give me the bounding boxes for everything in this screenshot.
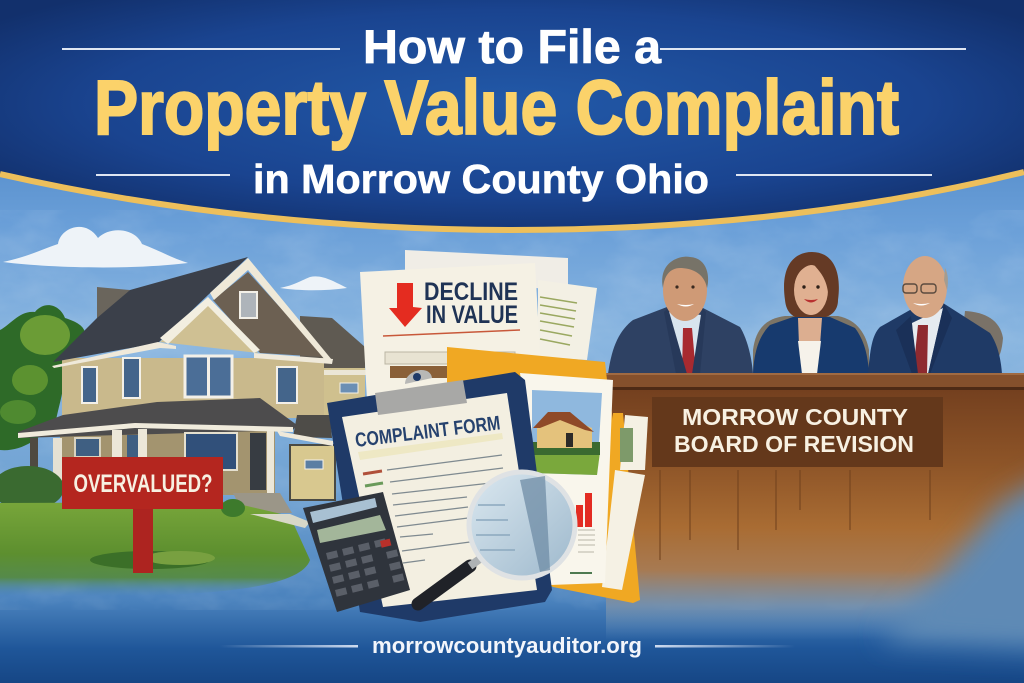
cloud	[3, 227, 347, 290]
sign: overvalued	[62, 457, 223, 573]
banner	[0, 0, 1024, 230]
sign text: OVERVALUED?	[74, 470, 212, 498]
website text: morrowcountyauditor.org	[372, 633, 642, 658]
title line 1: How to File a	[363, 20, 662, 73]
board name plate	[652, 397, 943, 467]
clip	[375, 370, 467, 415]
board member: left	[608, 257, 753, 374]
document heading	[424, 278, 518, 329]
arrow: decline	[389, 283, 422, 327]
wooden desk	[606, 373, 1024, 640]
tree	[0, 305, 85, 450]
board member: center	[753, 252, 869, 374]
folder	[447, 347, 648, 603]
house	[18, 257, 366, 513]
board name plate: BOARD OF REVISION	[674, 431, 914, 457]
house photo	[532, 390, 602, 475]
title line 2: Property Value Complaint	[94, 65, 899, 151]
board name plate: MORROW COUNTY	[682, 404, 908, 430]
magnifying glass	[418, 472, 575, 604]
document heading: IN VALUE	[426, 301, 518, 329]
document heading: DECLINE	[424, 278, 518, 306]
calculator	[303, 492, 410, 612]
form title: COMPLAINT FORM	[354, 412, 502, 452]
lawn	[0, 466, 310, 596]
bottom fade	[880, 470, 1024, 650]
clipboard	[327, 370, 552, 622]
title line 3: in Morrow County Ohio	[253, 156, 709, 202]
board member: right	[868, 256, 1003, 374]
bar chart	[576, 493, 592, 527]
document: decline in value	[360, 250, 597, 400]
